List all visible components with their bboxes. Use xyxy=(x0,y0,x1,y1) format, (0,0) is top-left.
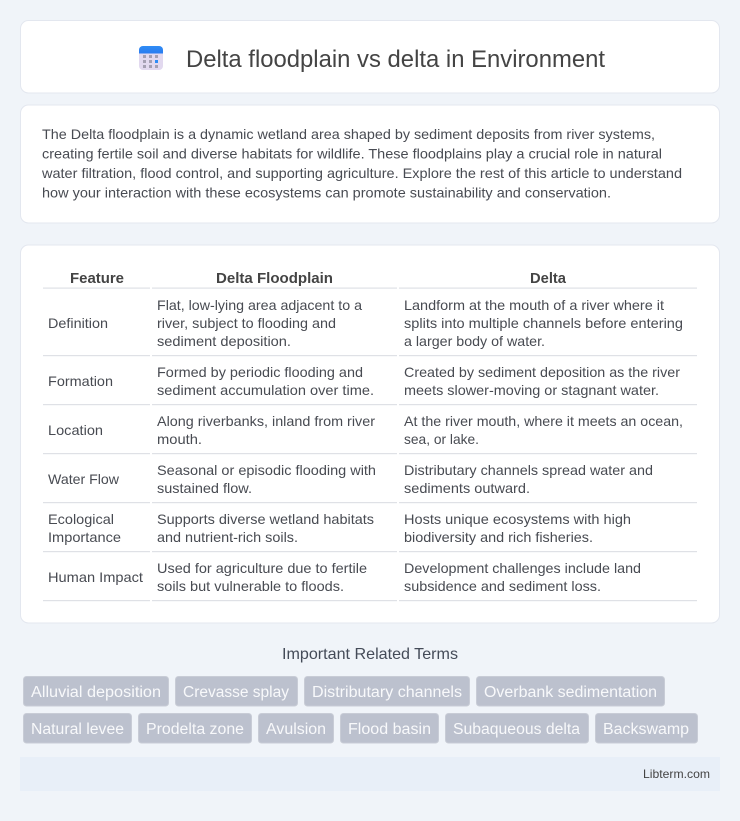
footer xyxy=(20,757,720,791)
row: human impact: subsidence and sediment loss. xyxy=(404,578,601,594)
icon: calendar xyxy=(139,46,163,70)
panel: introduction text xyxy=(20,105,720,223)
panel: introduction text: water filtration, flood control, and supporting agriculture. Explore the rest of this article to understand xyxy=(41,165,682,181)
row: definition xyxy=(48,297,683,349)
row: human impact: Human Impact xyxy=(48,569,143,585)
row: ecological importance: Importance xyxy=(48,529,121,545)
table header: Delta Floodplain xyxy=(216,271,333,287)
row: ecological importance: Ecological xyxy=(48,511,114,527)
row: ecological importance xyxy=(48,511,631,545)
tag list: Backswamp xyxy=(603,721,689,738)
table header xyxy=(70,271,567,287)
tag list: Flood basin xyxy=(348,721,431,738)
panel: introduction text: how your interaction with these ecosystems can promote sustainability and conservation. xyxy=(42,184,611,200)
row: definition: sediment deposition. xyxy=(157,333,291,349)
row: water flow: sediments outward. xyxy=(404,480,530,496)
row: formation: Created by sediment deposition as the river xyxy=(404,364,680,380)
row: formation: sediment accumulation over time. xyxy=(157,382,374,398)
row: formation: Formation xyxy=(48,373,113,389)
row: ecological importance: and nutrient-rich soils. xyxy=(157,529,298,545)
footer: Libterm.com xyxy=(643,767,710,781)
row: definition: a larger body of water. xyxy=(404,333,545,349)
row: formation: meets slower-moving or stagnant water. xyxy=(404,382,659,398)
row: location: Along riverbanks, inland from river xyxy=(157,413,375,429)
row: human impact: Used for agriculture due to fertile xyxy=(157,560,367,576)
panel: introduction text: The Delta floodplain is a dynamic wetland area shaped by sediment deposits from river systems, xyxy=(42,126,655,142)
panel: introduction text: creating fertile soil and diverse habitats for wildlife. These floodplains play a crucial role in natural xyxy=(42,146,662,162)
tag list: Subaqueous delta xyxy=(453,721,580,738)
tag list: Avulsion xyxy=(266,721,326,738)
table header: Delta xyxy=(530,271,567,287)
heading: important related terms: Important Related Terms xyxy=(282,646,458,663)
tag list: Alluvial deposition xyxy=(31,684,161,701)
row: ecological importance: biodiversity and rich fisheries. xyxy=(404,529,593,545)
row: location: Location xyxy=(48,422,103,438)
row: water flow: Water Flow xyxy=(48,471,120,487)
row: ecological importance: Hosts unique ecosystems with high xyxy=(404,511,631,527)
row: water flow xyxy=(48,462,653,496)
row: definition: river, subject to flooding and xyxy=(157,315,336,331)
tag list: Crevasse splay xyxy=(183,684,289,701)
row: water flow: Distributary channels spread water and xyxy=(404,462,653,478)
row: definition: Landform at the mouth of a river where it xyxy=(404,297,664,313)
row: ecological importance: Supports diverse wetland habitats xyxy=(157,511,374,527)
row: human impact xyxy=(48,560,641,594)
row: definition: splits into multiple channels before entering xyxy=(404,315,683,331)
row: human impact: soils but vulnerable to floods. xyxy=(157,578,344,594)
tag list xyxy=(24,676,698,743)
row: human impact: Development challenges include land xyxy=(404,560,641,576)
tag list: Natural levee xyxy=(31,721,124,738)
tag list: Distributary channels xyxy=(312,684,462,701)
row: definition: Flat, low-lying area adjacent to a xyxy=(157,297,362,313)
tag list: Overbank sedimentation xyxy=(484,684,657,701)
row: formation xyxy=(48,364,680,398)
table header: Feature xyxy=(70,271,124,287)
row: location: mouth. xyxy=(157,431,202,447)
row: definition: Definition xyxy=(48,315,108,331)
row: water flow: sustained flow. xyxy=(157,480,252,496)
title: Delta floodplain vs delta in Environment xyxy=(186,46,605,73)
panel: title card xyxy=(20,20,720,93)
row: location: At the river mouth, where it meets an ocean, xyxy=(404,413,683,429)
panel: comparison table xyxy=(20,245,720,623)
tag list: Prodelta zone xyxy=(146,721,244,738)
row: location: sea, or lake. xyxy=(404,431,479,447)
row: water flow: Seasonal or episodic flooding with xyxy=(157,462,376,478)
row: location xyxy=(48,413,683,447)
row: formation: Formed by periodic flooding and xyxy=(157,364,363,380)
